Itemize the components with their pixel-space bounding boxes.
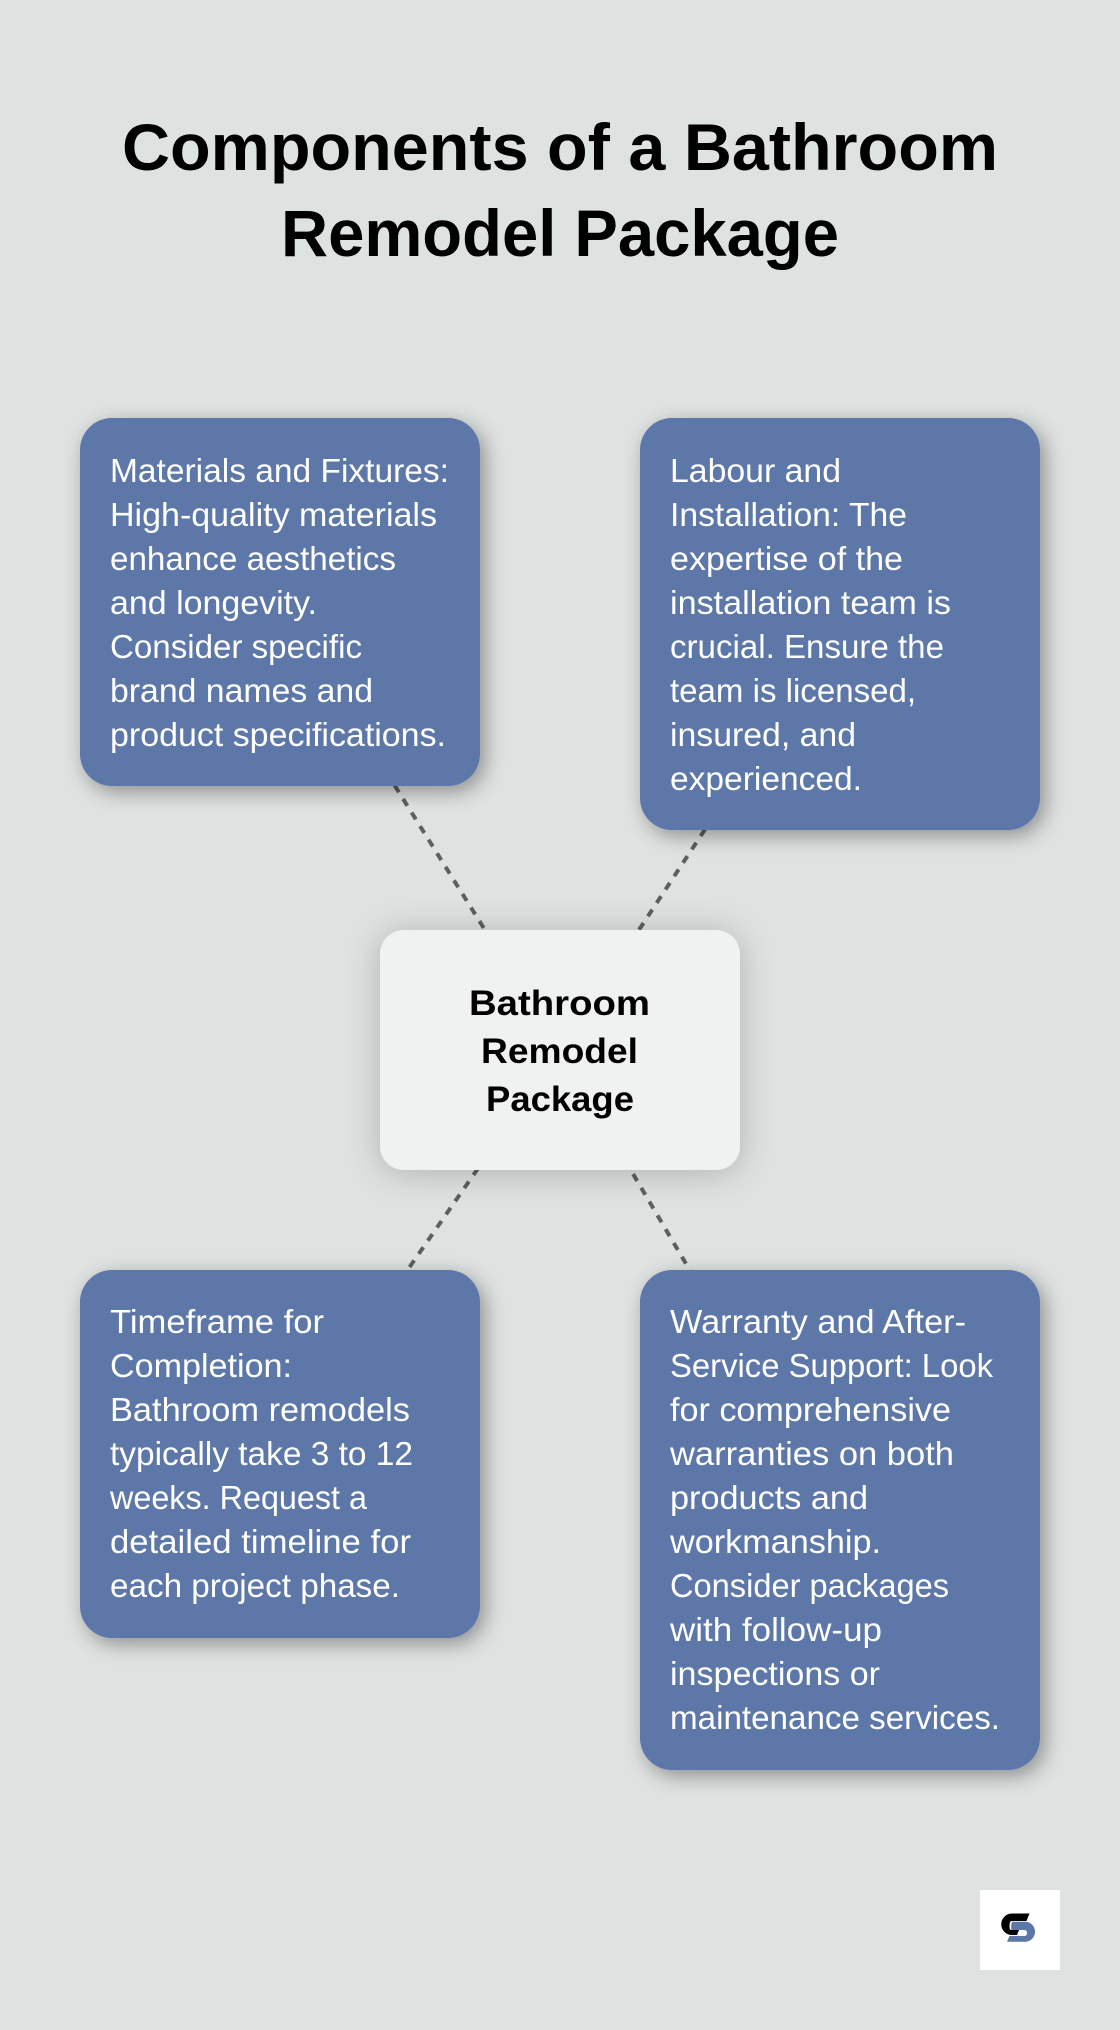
panel: warranty and after-service support: with follow-up — [669, 1611, 882, 1648]
panel: labour and installation: Installation: The — [670, 496, 907, 533]
panel: materials and fixtures: Consider specific — [110, 628, 362, 665]
panel: warranty and after-service support: Warranty and After- — [670, 1303, 966, 1340]
panel: timeframe for completion — [80, 1270, 480, 1638]
panel: timeframe for completion: detailed timeline for — [110, 1523, 411, 1560]
panel: labour and installation: experienced. — [670, 760, 862, 797]
panel: timeframe for completion: each project phase. — [110, 1567, 400, 1604]
connector: labour to centre — [560, 624, 840, 1050]
connector: warranty to centre — [560, 1050, 840, 1525]
title: Remodel Package — [281, 196, 839, 270]
panel: labour and installation: Labour and — [670, 452, 841, 489]
panel: timeframe for completion: Completion: — [110, 1347, 292, 1384]
panel: labour and installation: installation team is — [670, 584, 951, 621]
panel: materials and fixtures: and longevity. — [110, 584, 317, 621]
panel: warranty and after-service support: products and — [670, 1479, 868, 1516]
title: Components of a Bathroom — [122, 110, 998, 184]
panel: warranty and after-service support: warranties on both — [669, 1435, 954, 1472]
panel: materials and fixtures — [80, 418, 480, 786]
panel: warranty and after-service support: for comprehensive — [670, 1391, 951, 1428]
panel: labour and installation: expertise of the — [670, 540, 903, 577]
panel: centre node: Remodel — [481, 1032, 638, 1071]
panel: labour and installation — [640, 418, 1040, 830]
panel: labour and installation: crucial. Ensure the — [670, 628, 944, 665]
panel: timeframe for completion: typically take 3 to 12 — [110, 1435, 413, 1472]
panel: materials and fixtures: High-quality materials — [110, 496, 437, 533]
panel: materials and fixtures: enhance aesthetics — [110, 540, 396, 577]
panel: timeframe for completion: Timeframe for — [110, 1303, 324, 1340]
panel: centre node — [380, 930, 740, 1170]
panel: materials and fixtures: Materials and Fixtures: — [110, 452, 449, 489]
icon: logo badge — [980, 1890, 1060, 1970]
panel: timeframe for completion: Bathroom remodels — [110, 1391, 410, 1428]
connector: materials to centre — [280, 602, 560, 1050]
title — [122, 110, 998, 270]
panel: labour and installation: insured, and — [670, 716, 856, 753]
panel: materials and fixtures: product specifications. — [110, 716, 446, 753]
panel: centre node: Package — [486, 1080, 634, 1119]
panel: warranty and after-service support: inspections or — [670, 1655, 880, 1692]
panel: warranty and after-service support — [640, 1270, 1040, 1770]
panel: materials and fixtures: brand names and — [110, 672, 373, 709]
panel: timeframe for completion: weeks. Request a — [109, 1479, 368, 1516]
panel: warranty and after-service support: maintenance services. — [670, 1699, 1000, 1736]
panel: labour and installation: team is licensed, — [670, 672, 916, 709]
panel: warranty and after-service support: workmanship. — [669, 1523, 881, 1560]
panel: warranty and after-service support: Service Support: Look — [670, 1347, 993, 1384]
connector: timeframe to centre — [280, 1050, 560, 1454]
panel: centre node: Bathroom — [469, 984, 650, 1023]
panel: warranty and after-service support: Consider packages — [670, 1567, 949, 1604]
